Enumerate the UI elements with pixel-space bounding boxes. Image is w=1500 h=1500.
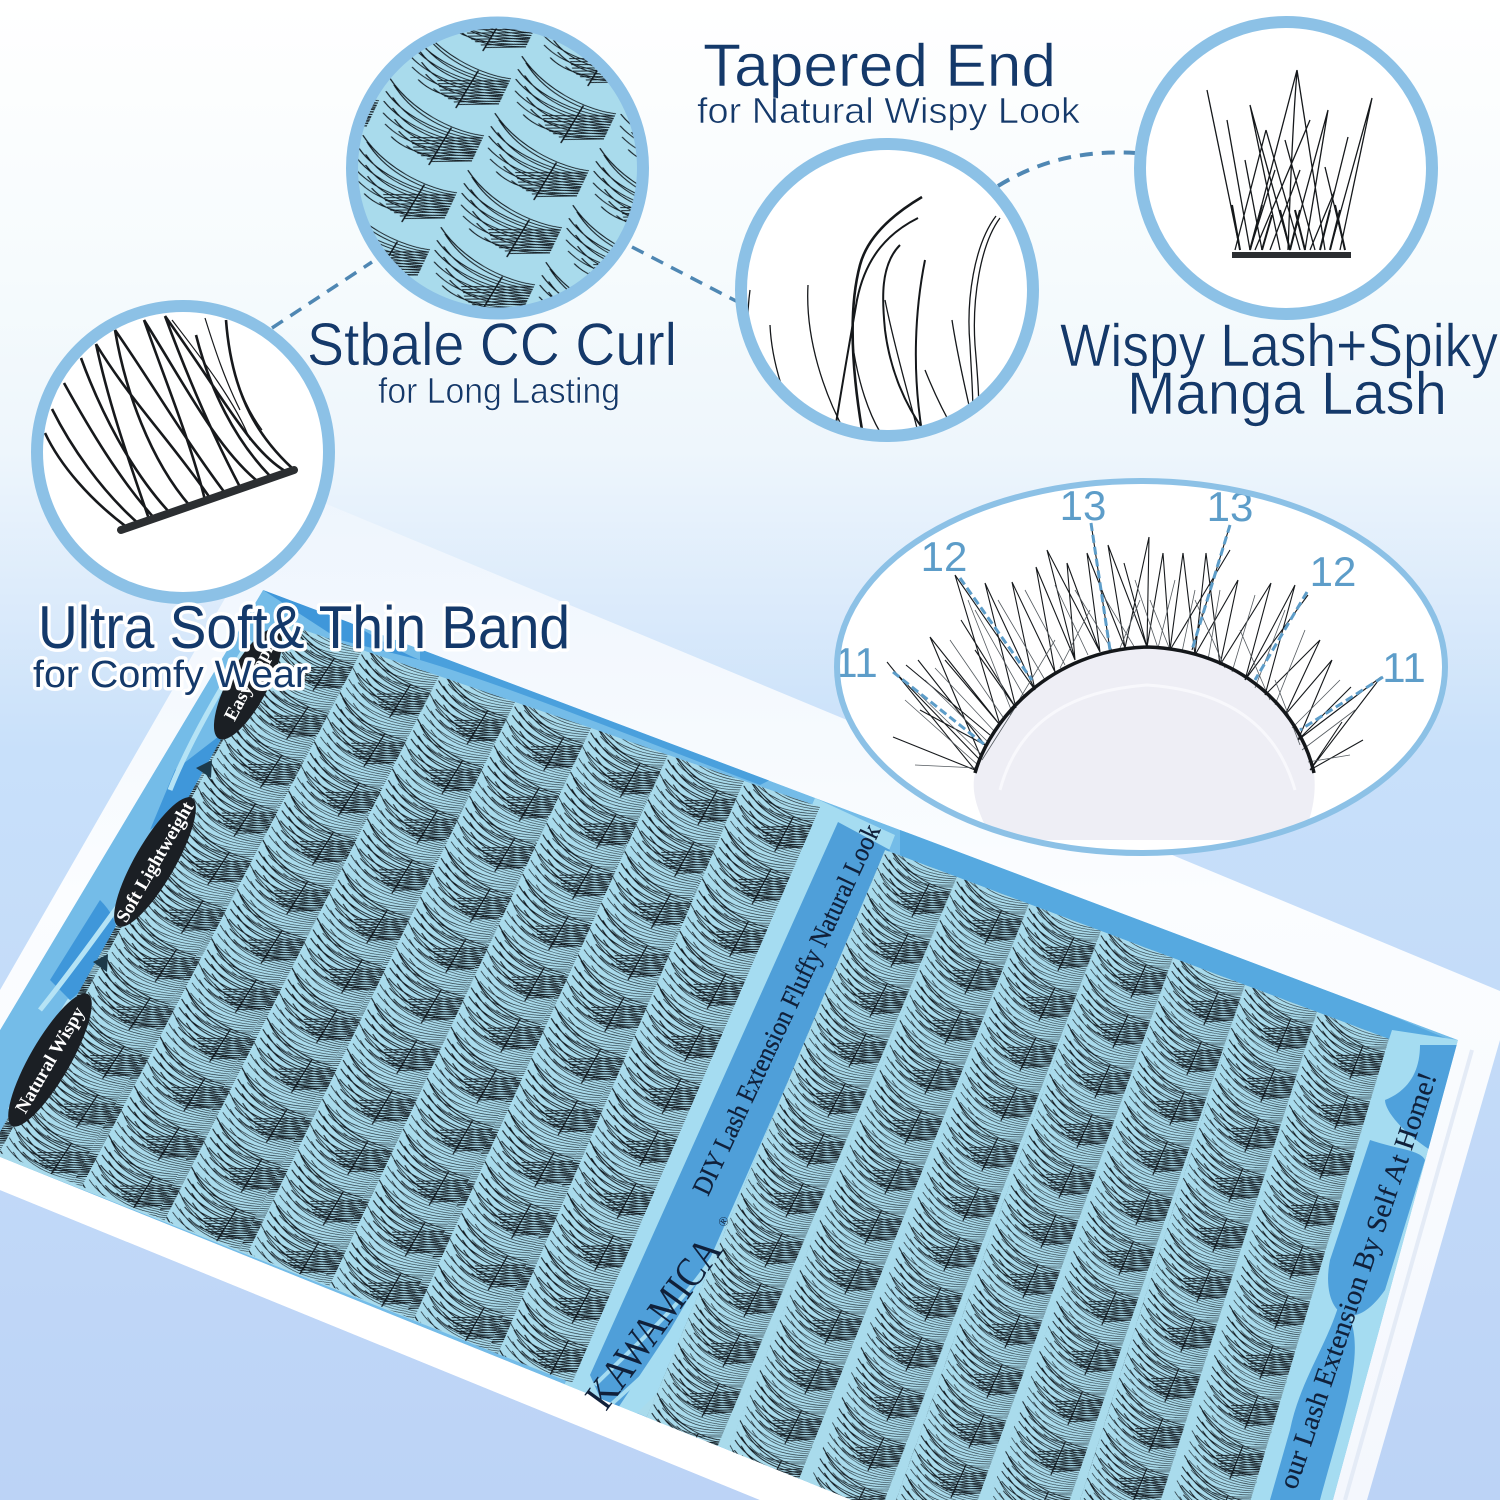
card text: tagline: our Lash Extension By Self At Home! [1273,1068,1444,1493]
circle: CC curl closeup [350,20,646,316]
product: lash tray [0,493,1500,1500]
circle: tapered end closeup [741,144,1033,436]
card text: DIY: DIY Lash Extension Fluffy Natural Look [686,819,886,1200]
circle: thin band closeup [37,306,329,598]
heading: tapered end [697,32,1081,131]
lash columns left section [0,624,820,1383]
middle band pale [560,798,895,1440]
card base [0,590,1458,1500]
connector: left circle to curl circle [272,262,372,328]
right margin blue patches [1270,1045,1458,1500]
spiky lash band [1232,252,1351,258]
tray right ridge [1345,1050,1472,1500]
thin lash band [121,470,294,530]
oval badge: easy: Easy Apply [220,633,283,724]
right margin pale [1240,1030,1458,1500]
oval badge: soft lightweight: Soft Lightweight [112,798,199,926]
connector: tapered circle to spiky circle [998,152,1136,186]
tray inner ridge [15,680,232,1010]
arrow marker upper [196,760,212,778]
arrow marker lower [93,954,108,972]
heading: tapered end: for Natural Wispy Look [697,90,1081,131]
length guide dashes [893,523,1383,745]
heading: stable curl [307,311,677,411]
heading: wispy and spiky: Manga Lash [1127,360,1447,427]
length numbers: 13 [1060,482,1106,529]
heading: thin band: for Comfy Wear [33,654,308,696]
length numbers: 13 [1207,483,1253,530]
length numbers: 11 [834,639,878,686]
logo swirl [594,1256,711,1404]
length numbers: 12 [921,533,967,580]
heading: thin band [33,594,570,696]
mannequin dome [974,647,1315,840]
heading: thin band: Ultra Soft& Thin Band [38,594,570,661]
white tray lid [0,493,1500,1500]
heading: stable curl: for Long Lasting [378,370,620,411]
oval badge: soft lightweight [101,788,209,936]
card swirls [10,590,1450,1110]
connector: curl circle to tapered circle [632,247,738,302]
card text: registered mark: ® [714,1213,732,1230]
card text: brand: KAWAMICA [577,1229,732,1418]
heading: wispy and spiky [1060,312,1498,427]
pale base under lashes [0,624,820,1383]
pale base under right lashes [620,850,1389,1500]
length numbers: 12 [1310,548,1356,595]
oval badge: easy [201,620,295,748]
ellipse: lash length map [834,481,1445,853]
middle band blue [590,822,890,1420]
heading: stable curl: Stbale CC Curl [307,311,677,378]
circle: spiky manga lash closeup [1140,22,1432,314]
heading: tapered end: Tapered End [703,32,1056,99]
lash columns right section [612,850,1389,1500]
oval badge: natural wispy: Natural Wispy [12,1003,90,1117]
oval badge: natural wispy [0,984,105,1136]
lashes fan [887,523,1381,770]
length numbers: 11 [1382,644,1426,691]
printed blue card [0,590,1458,1500]
lash band arc [975,647,1314,773]
length numbers [834,482,1426,691]
dome inner highlight [1000,685,1295,790]
lower tray edge [0,1155,852,1500]
